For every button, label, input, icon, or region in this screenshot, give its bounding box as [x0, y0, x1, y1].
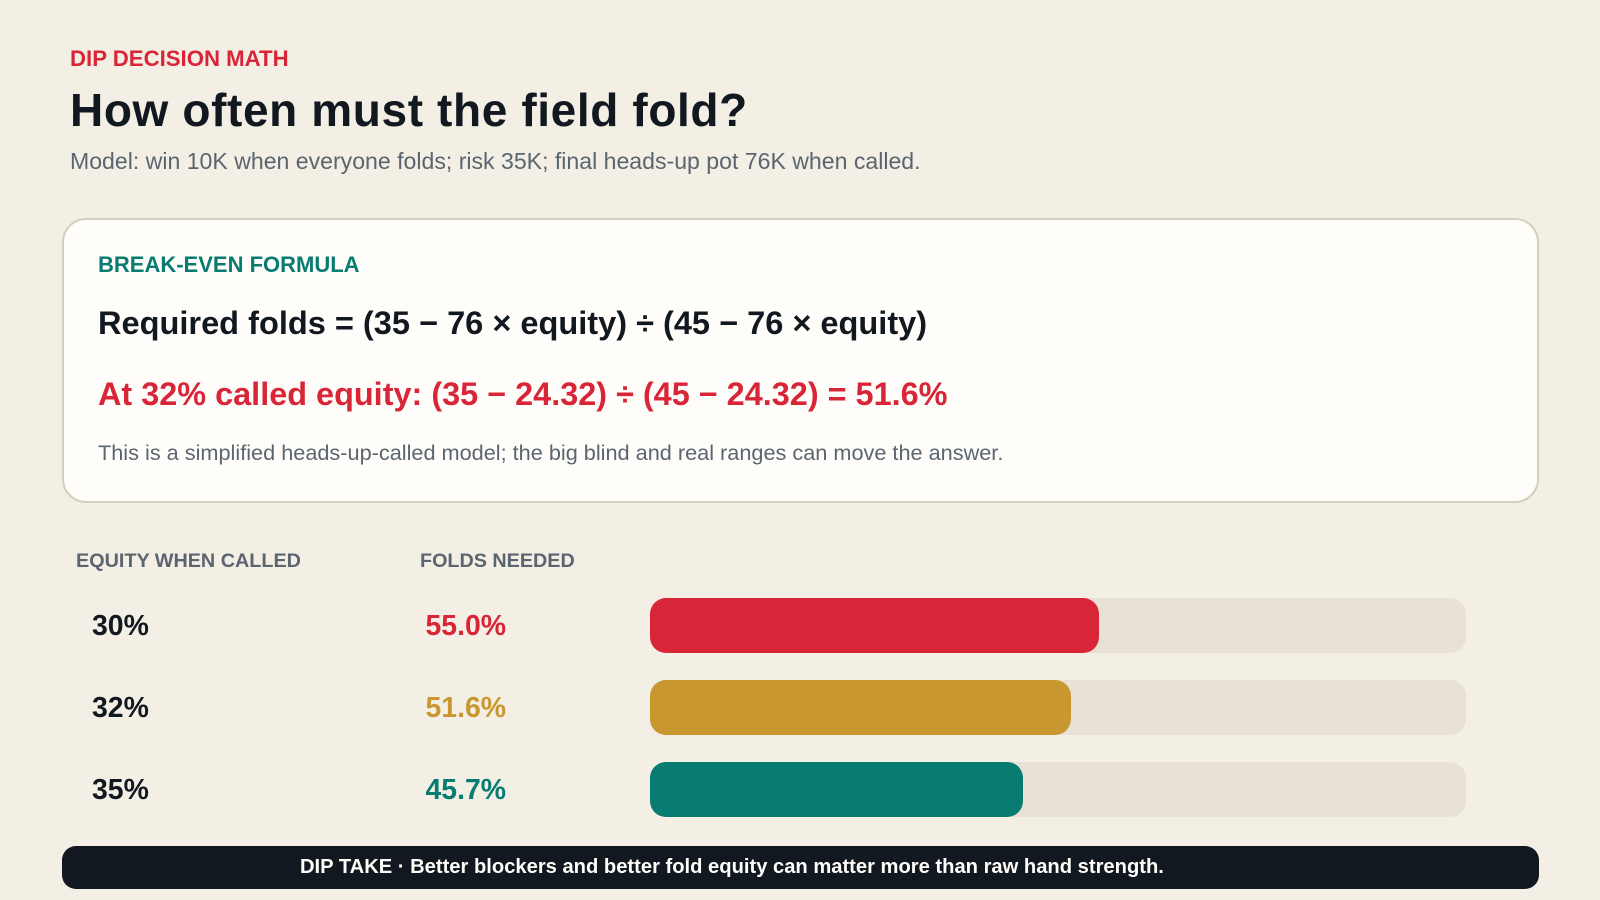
- column label: equity when called: EQUITY WHEN CALLED: [76, 550, 301, 572]
- panel: break-even formula: [62, 218, 1539, 503]
- worked example: At 32% called equity: (35 − 24.32) ÷ (45 − 24.32) = 51.6%: [98, 376, 948, 412]
- equity value: 32%: [92, 692, 149, 724]
- bar track: [650, 680, 1466, 735]
- bar track: [650, 598, 1466, 653]
- equity value: 30%: [92, 610, 149, 642]
- row: 30% equity: [92, 598, 1466, 653]
- subtitle: Model: win 10K when everyone folds; risk 35K; final heads-up pot 76K when called.: [70, 148, 921, 174]
- general formula: Required folds = (35 − 76 × equity) ÷ (45 − 76 × equity): [98, 305, 927, 341]
- row: 35% equity: [92, 762, 1466, 817]
- takeaway bar: [62, 846, 1539, 889]
- bar fill 45.7%: [650, 762, 1023, 817]
- column label: folds needed: FOLDS NEEDED: [420, 550, 575, 572]
- takeaway text: DIP TAKE · Better blockers and better fold equity can matter more than raw hand strength.: [300, 856, 1164, 878]
- row: 32% equity: [92, 680, 1466, 735]
- equity value: 35%: [92, 774, 149, 806]
- folds value: 55.0%: [426, 610, 506, 642]
- title: How often must the field fold?: [70, 84, 748, 136]
- folds value: 45.7%: [426, 774, 506, 806]
- kicker: DIP DECISION MATH: [70, 46, 289, 71]
- panel heading: BREAK-EVEN FORMULA: [98, 252, 360, 277]
- model note: This is a simplified heads-up-called model; the big blind and real ranges can move the answer.: [98, 440, 1003, 465]
- folds value: 51.6%: [426, 692, 506, 724]
- bar fill 55.0%: [650, 598, 1099, 653]
- bar fill 51.6%: [650, 680, 1071, 735]
- bar track: [650, 762, 1466, 817]
